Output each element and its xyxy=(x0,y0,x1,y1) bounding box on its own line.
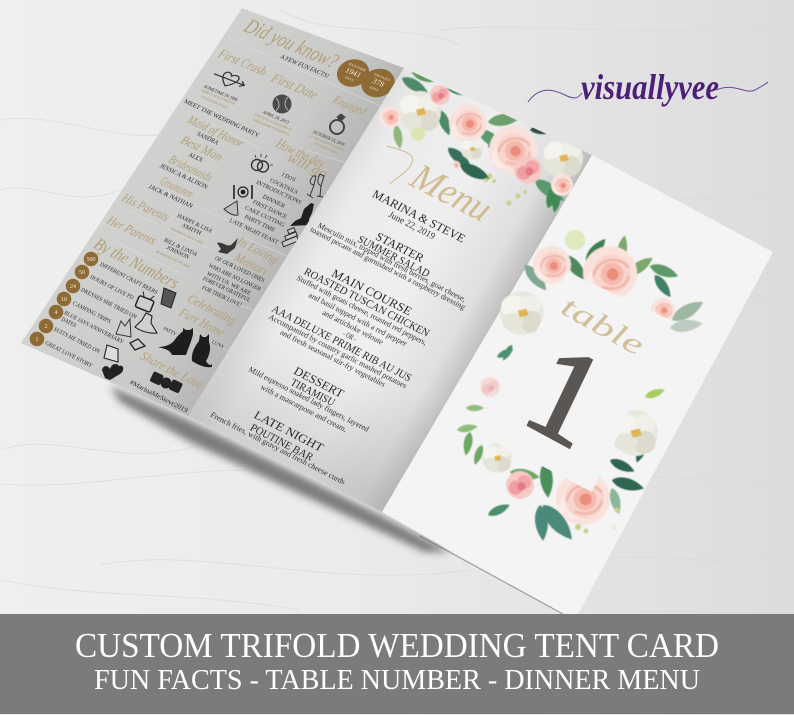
menu title script: Menu xyxy=(402,156,500,230)
fact: first date: First Date xyxy=(267,71,320,103)
icon: black cat two xyxy=(192,334,212,367)
icon: plate and cutlery xyxy=(234,185,252,199)
section: by the numbers xyxy=(30,234,183,380)
badge: days engaged: ENGAGED xyxy=(373,72,391,82)
icon: blue jays xyxy=(130,339,145,350)
fact: engaged xyxy=(308,92,370,155)
menu text: Stuffed with goats cheese, roasted red peppers, xyxy=(295,273,429,347)
fact: first date: APRIL 20, 2013 xyxy=(261,110,290,126)
section divider xyxy=(112,38,385,360)
fact: first crush: SOMETIME IN 1986 xyxy=(202,85,239,103)
menu text: MAIN COURSE xyxy=(329,266,415,318)
section: wedding party: Best Man xyxy=(178,132,226,164)
badge numbers: 24 xyxy=(70,284,76,290)
icon: dress xyxy=(135,313,157,333)
fact: engaged: Engaged xyxy=(330,92,370,118)
heading: did you know: Did you know? xyxy=(239,13,344,73)
section: how the day will go: DINNER xyxy=(261,194,286,210)
section: wedding party: JACK & NATHAN xyxy=(147,184,194,210)
section: by the numbers: DATES xyxy=(60,317,77,329)
section: how the day will go: COCKTAILS xyxy=(268,178,299,196)
section: celebrating furr home xyxy=(158,291,240,367)
section: parents: HARRY & LISA xyxy=(176,213,214,235)
shadow under card xyxy=(110,386,450,552)
section: parents: BILL & LINDA xyxy=(162,238,199,258)
section: share the love xyxy=(128,348,207,414)
section: how the day will go: CAKE CUTTING xyxy=(243,205,286,229)
badge: days together xyxy=(331,55,375,91)
icon: wedding rings xyxy=(252,154,273,172)
section: parents: JOHNSON xyxy=(165,245,190,261)
fact: first date: WATCHING A JAYS GAME IN xyxy=(253,113,293,132)
menu text: LATE NIGHT xyxy=(251,408,327,455)
icon: baseball xyxy=(272,94,292,114)
section: parents: SMITH xyxy=(181,223,203,237)
badge: days together: TOGETHER xyxy=(347,62,367,73)
menu text: and basil topped with a red pepper xyxy=(307,291,409,348)
subheading: A FEW FUN FACTS! xyxy=(279,54,330,80)
table script: table xyxy=(556,289,649,363)
section: celebrating furr home: Celebrating xyxy=(185,291,240,327)
icon: dove xyxy=(217,238,238,254)
panel: table number xyxy=(382,155,773,614)
menu text: MARINA & STEVE xyxy=(370,187,468,245)
menu floral band xyxy=(379,68,583,213)
number badges xyxy=(30,252,98,346)
section: wedding party: Bridesmaids xyxy=(166,152,216,184)
section: in loving memory: FOREVER GRATEFUL xyxy=(201,276,252,304)
badge numbers: 2 xyxy=(44,324,48,330)
section: by the numbers: By the Numbers xyxy=(90,234,183,292)
fact: first crush: THIRD FOR OUR MONTH xyxy=(200,89,236,106)
section: wedding party xyxy=(147,98,261,210)
section: in loving memory: FOR THEIR LOVE! xyxy=(200,285,243,309)
fact: first date: THEIR PRESSBOX BASEMENT xyxy=(251,118,291,137)
menu text: June 22, 2019 xyxy=(386,210,437,242)
badge numbers xyxy=(36,257,96,343)
icon: social icons xyxy=(149,371,183,394)
section: wedding party: Maid of Honor xyxy=(184,112,248,150)
menu text: French fries, with gravy and fresh cheese curds xyxy=(209,410,347,486)
banner headline: CUSTOM TRIFOLD WEDDING TENT CARD xyxy=(75,626,719,665)
badge: days together: 1941 xyxy=(343,66,363,79)
menu text: with a mascarpone and cream. xyxy=(259,383,349,434)
badge: days engaged: DAYS xyxy=(369,85,380,92)
table number floral frame xyxy=(456,230,706,545)
menu text: and fresh seasonal stir-fry vegetables xyxy=(278,328,387,389)
section: wedding party: JESSICA & ALISON xyxy=(158,163,209,191)
menu text: POUTINE BAR xyxy=(248,422,316,464)
icon: black cat one xyxy=(158,328,193,355)
icon: wedding cake xyxy=(282,228,299,247)
section: how the day will go: LATE NIGHT FEAST xyxy=(228,218,279,246)
icon: beer glass xyxy=(161,288,176,308)
section: parents xyxy=(104,190,214,269)
logo: visuallyvee: visuallyvee xyxy=(581,67,719,107)
section: in loving memory: Memory xyxy=(231,249,272,279)
section: parents: Her Parents xyxy=(104,212,160,247)
menu text: SUMMER SALAD xyxy=(355,234,432,280)
icon: champagne glasses xyxy=(307,174,324,198)
badge: days together: DAYS xyxy=(344,75,355,82)
badge numbers: 4 xyxy=(54,310,58,316)
section: how the day will go: FIRST DANCE xyxy=(251,200,288,220)
panel: fun facts xyxy=(21,8,404,416)
badge numbers: 50 xyxy=(79,270,85,276)
badge numbers: 500 xyxy=(86,257,96,263)
menu text: - OR - xyxy=(341,329,359,343)
section: wedding party: SANDRA xyxy=(195,131,220,147)
section: in loving memory: OF OUR LOVED ONES xyxy=(213,256,265,284)
fact: engaged: AT CASA LOMA xyxy=(313,142,339,155)
section: by the numbers: HOURS OF LIVE PD xyxy=(88,275,135,302)
section: in loving memory: WITH US. WE ARE xyxy=(205,271,252,297)
menu text: and artichoke veloute xyxy=(321,308,385,347)
numeral one: 1 xyxy=(506,314,627,477)
menu text: Accompanied by country garlic mashed potatoes xyxy=(267,312,409,390)
section: by the numbers: BLUE JAYS ANNIVERSARY xyxy=(62,310,125,346)
menu text: STARTER xyxy=(373,229,427,265)
fact: first crush: AT FOUR HER SEVEN xyxy=(200,95,228,109)
icon: pizza slice xyxy=(224,201,238,215)
badge numbers: 10 xyxy=(61,297,67,303)
fact: first crush xyxy=(200,47,269,109)
icon: campfire xyxy=(116,319,131,337)
menu text xyxy=(209,187,468,486)
section: how the day will go xyxy=(224,136,331,247)
icon: ring xyxy=(330,114,345,134)
section: how the day will go: will go xyxy=(284,150,331,182)
section: wedding party: Groomsmen xyxy=(157,174,196,201)
section: by the numbers: GREAT LOVE STORY xyxy=(44,341,94,370)
badge: days engaged xyxy=(355,64,401,102)
section: how the day will go: How the day xyxy=(272,136,328,172)
fact: first date xyxy=(251,71,320,137)
section: by the numbers: DIFFERENT CRAFT BEERS xyxy=(98,262,159,296)
menu text: Mild espresso soaked lady fingers, layered xyxy=(247,365,371,434)
fact: first crush: First Crush xyxy=(214,47,269,79)
menu text: Mesculin mix, topped with fresh berries, goat cheese, xyxy=(316,221,468,304)
section: in loving memory: In Loving xyxy=(233,233,282,266)
section: by the numbers: SUITS HE TRIED ON xyxy=(52,327,101,355)
icon: television xyxy=(135,291,156,312)
icon: dancing couple xyxy=(290,203,314,226)
section: wedding party: ALEX xyxy=(187,152,204,164)
icon: heart with arrow xyxy=(210,68,248,92)
icon: hearts xyxy=(102,364,123,380)
banner xyxy=(0,614,794,714)
section: celebrating furr home: Furr Home xyxy=(176,305,228,339)
section: in loving memory xyxy=(200,233,282,309)
section: parents: His Parents xyxy=(118,190,173,224)
fact: engaged: OCTOBER 15, 2016 xyxy=(311,130,346,148)
section: in loving memory: WHO ARE NO LONGER xyxy=(207,263,262,293)
section: celebrating furr home: LUNA xyxy=(210,340,225,350)
section: parents: MARRIED 50 YEARS xyxy=(155,250,191,269)
section: by the numbers: CAMPING TRIPS xyxy=(71,301,112,325)
logo: visuallyvee xyxy=(528,67,768,107)
section: how the day will go: PARTY TIME xyxy=(243,214,276,234)
banner subheadline: FUN FACTS - TABLE NUMBER - DINNER MENU xyxy=(94,664,700,696)
icon: suit xyxy=(104,345,118,362)
section: by the numbers: DRESSES SHE TRIED ON xyxy=(79,287,138,321)
fact: engaged: AT THE HAUNTED HOUSE xyxy=(308,134,345,152)
section: wedding party: MEET THE WEDDING PARTY xyxy=(183,98,261,139)
menu text: DESSERT xyxy=(291,364,347,401)
section: celebrating furr home: PATTY xyxy=(162,327,177,337)
section: share the love: #MarinaMeSteve2019 xyxy=(128,379,190,414)
section: how the day will go: I DO'S xyxy=(280,172,296,183)
badge: days engaged: 378 xyxy=(370,77,386,89)
menu text: ROASTED TUSCAN CHICKEN xyxy=(302,266,432,340)
menu text: AAA DELUXE PRIME RIB AU JUS xyxy=(269,303,414,384)
section: how the day will go: INTRODUCTIONS xyxy=(255,180,302,206)
section: parents: MARRIED 60 YEARS xyxy=(169,227,204,246)
menu text: TIRAMISU xyxy=(288,377,337,409)
panel: menu xyxy=(188,68,592,512)
section: share the love: Share the Love xyxy=(138,348,207,392)
menu text: toasted pecans and garnished with a raspberry dressing xyxy=(309,225,467,311)
badge numbers: 1 xyxy=(36,337,38,343)
table number white window xyxy=(482,272,670,492)
card bottom edge line xyxy=(420,536,563,614)
